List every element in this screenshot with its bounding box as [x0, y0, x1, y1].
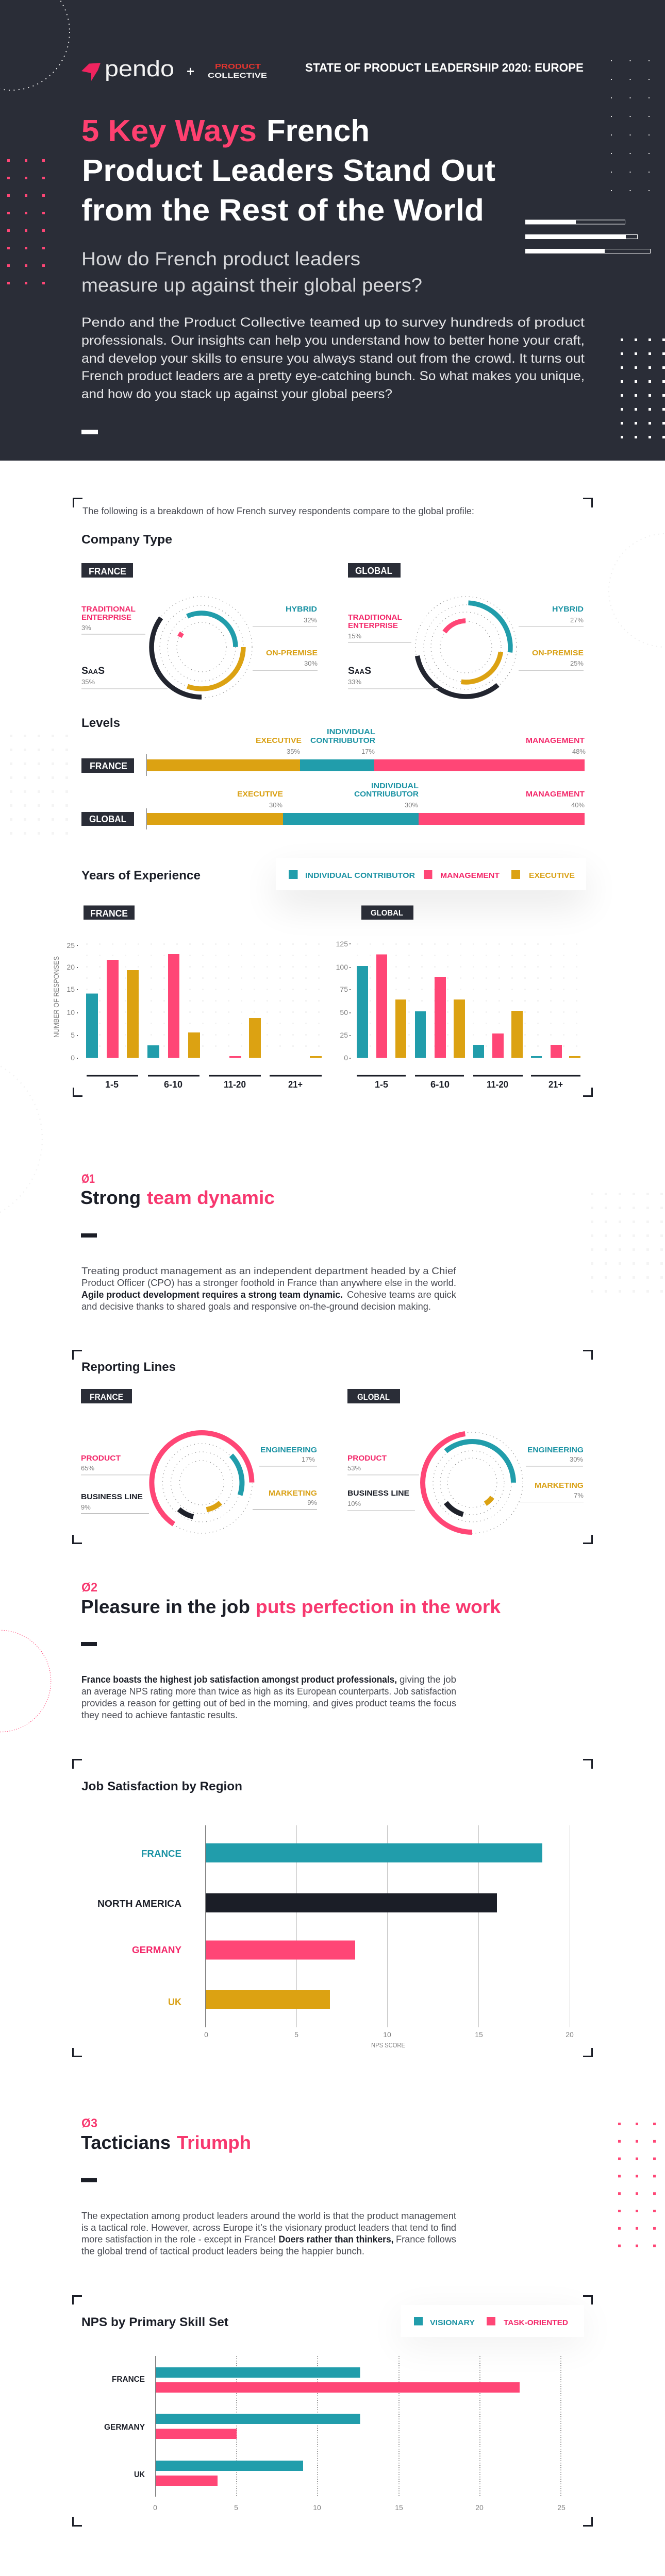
chart: years of experience france: 25: [66, 941, 75, 950]
chart: years of experience global: 21+: [548, 1079, 563, 1090]
chart: reporting lines global donut: [414, 1425, 530, 1541]
hero dash: [81, 430, 98, 434]
subtitle: [81, 248, 422, 296]
labels: company type global: ON-PREMISE: [532, 649, 584, 657]
bar chart: 0: [153, 2503, 157, 2512]
bar chart: NPS SCORE: [371, 2041, 405, 2049]
chart: company type global donut: [396, 578, 536, 717]
labels: company type france: 35%: [81, 678, 95, 686]
tag: france: [81, 1389, 132, 1403]
legend: TASK-ORIENTED: [504, 2318, 568, 2327]
heading: pleasure in the job: puts perfection in the work: [256, 1596, 501, 1617]
heading: company type: Company Type: [81, 533, 172, 547]
section number: Ø1: [81, 1172, 95, 1186]
legend: [401, 2305, 584, 2345]
chart: levels france: 35%: [287, 748, 300, 755]
chart: years of experience global: 50: [340, 1008, 348, 1016]
chart: years of experience global: 25: [340, 1031, 348, 1039]
labels: reporting lines global: 7%: [574, 1492, 584, 1499]
chart: years of experience france: 11-20: [224, 1079, 246, 1090]
heading: tacticians triumph: Triumph: [177, 2132, 251, 2153]
heading: Reporting Lines: [81, 1360, 176, 1374]
title: from the Rest of the World: [81, 193, 484, 227]
legend: VISIONARY: [430, 2318, 475, 2327]
heading: strong team dynamic: [80, 1187, 275, 1208]
labels: reporting lines france: 9%: [307, 1499, 317, 1506]
chart: years of experience france: NUMBER OF RESPONSES: [53, 956, 60, 1038]
chart: years of experience global: 75: [340, 985, 348, 993]
chart: levels france: INDIVIDUAL: [327, 727, 375, 736]
paragraph: and decisive thanks to shared goals and responsive on-the-ground decision making.: [81, 1301, 431, 1312]
heading: Job Satisfaction by Region: [81, 1780, 242, 1793]
bar chart: 15: [475, 2030, 483, 2039]
bar chart: UK: [134, 2470, 145, 2479]
panel: respondent profile: [53, 499, 592, 1096]
tag: global: GLOBAL: [357, 1392, 390, 1402]
bar chart: [104, 2356, 566, 2512]
labels: company type france: TRADITIONAL: [81, 605, 136, 614]
paragraph: an average NPS rating more than twice as high as its European counterparts. Job satisfaction: [81, 1686, 456, 1697]
labels: reporting lines france: MARKETING: [269, 1489, 317, 1498]
labels: company type france: HYBRID: [286, 605, 317, 614]
bar chart: 20: [566, 2030, 574, 2039]
chart: levels france: FRANCE: [90, 761, 127, 771]
intro paragraph: and how do you stack up against your global peers?: [81, 387, 392, 401]
heading: NPS by Primary Skill Set: [81, 2315, 228, 2329]
section 02: [81, 1581, 501, 1720]
tag: global: [348, 563, 401, 578]
labels: company type france: 3%: [81, 624, 91, 632]
chart: years of experience france: 1-5: [105, 1079, 119, 1090]
section 03: [81, 2116, 456, 2257]
chart: years of experience france: 21+: [288, 1079, 303, 1090]
intro paragraph: professionals. Our insights can help you understand how to better hone your craft,: [81, 333, 585, 348]
bar chart: [97, 1825, 574, 2049]
paragraph: more satisfaction in the role - except in France!: [81, 2234, 276, 2244]
decorative progress bars: [525, 219, 651, 253]
chart: levels global: GLOBAL: [89, 814, 126, 824]
chart: reporting lines france donut: [132, 1413, 271, 1552]
bar chart: GERMANY: [104, 2423, 145, 2432]
intro paragraph: and develop your skills to ensure you always stand out from the crowd. It turns out: [81, 351, 585, 366]
chart: years of experience france: 15: [66, 985, 75, 993]
bar chart: FRANCE: [141, 1849, 181, 1859]
tag: global: [347, 1389, 400, 1403]
legend: years of experience: [276, 858, 586, 906]
labels: company type france: 30%: [304, 659, 318, 667]
chart: levels france: EXECUTIVE: [256, 736, 302, 745]
labels: reporting lines france: BUSINESS LINE: [81, 1493, 143, 1501]
paragraph: Cohesive teams are quick: [347, 1290, 457, 1300]
chart: years of experience france: 6-10: [164, 1079, 182, 1090]
heading: years of experience: Years of Experience: [81, 869, 201, 883]
hero panel: [0, 0, 665, 461]
subtitle: measure up against their global peers?: [81, 275, 422, 296]
labels: company type global: HYBRID: [552, 605, 584, 614]
tag: france: [81, 563, 133, 578]
chart: years of experience global: 6-10: [430, 1079, 450, 1090]
labels: company type france: 32%: [304, 616, 317, 624]
chart: levels global: [81, 782, 585, 829]
paragraph: France boasts the highest job satisfaction amongst product professionals,: [81, 1674, 397, 1685]
labels: reporting lines france: [81, 1446, 317, 1514]
paragraph: [81, 2211, 456, 2257]
chart: levels global: EXECUTIVE: [237, 790, 283, 799]
labels: reporting lines global: [347, 1446, 584, 1511]
labels: reporting lines global: BUSINESS LINE: [347, 1489, 409, 1498]
heading: strong team dynamic: Strong: [80, 1187, 141, 1208]
bar chart: 0: [204, 2030, 208, 2039]
legend: years of experience: MANAGEMENT: [440, 871, 500, 880]
heading: levels: Levels: [81, 716, 120, 730]
title: French: [267, 114, 370, 148]
intro paragraph: French product leaders are a pretty eye-catching bunch. So what makes you unique,: [81, 369, 585, 383]
labels: company type global: SaaS: [348, 666, 371, 676]
bar chart: 10: [313, 2503, 321, 2512]
chart: years of experience global: 125: [336, 940, 348, 948]
paragraph: Doers rather than thinkers,: [278, 2234, 394, 2244]
chart: levels france: CONTRIUBUTOR: [310, 736, 375, 745]
chart: levels global: 30%: [405, 801, 418, 809]
chart: levels global: 30%: [269, 801, 282, 809]
tag: france: FRANCE: [90, 1392, 123, 1402]
tag: global: GLOBAL: [355, 566, 392, 576]
labels: company type france: [81, 605, 318, 689]
plus sign: +: [187, 63, 194, 79]
heading: tacticians triumph: Tacticians: [81, 2132, 171, 2153]
intro paragraph: Pendo and the Product Collective teamed up to survey hundreds of product: [81, 315, 585, 330]
paragraph: is a tactical role. However, across Europe it’s the visionary product leaders that tend to find: [81, 2223, 456, 2233]
heading: pleasure in the job: Pleasure in the job: [81, 1596, 250, 1617]
labels: reporting lines global: MARKETING: [535, 1481, 584, 1490]
bar chart: UK: [168, 1997, 181, 2007]
bar chart: 5: [294, 2030, 298, 2039]
panel: reporting lines: [73, 1351, 592, 1552]
chart: levels france: [81, 727, 586, 776]
labels: company type global: 15%: [348, 632, 361, 640]
report label: STATE OF PRODUCT LEADERSHIP 2020: EUROPE: [305, 61, 584, 74]
paragraph: The expectation among product leaders around the world is that the product management: [81, 2211, 456, 2221]
chart: years of experience global: 11-20: [487, 1079, 508, 1090]
product collective logo: PRODUCT: [215, 62, 261, 70]
product collective logo: [208, 62, 267, 79]
panel: NPS by primary skill set: [73, 2296, 592, 2526]
labels: company type global: TRADITIONAL: [348, 613, 402, 622]
paragraph: giving the job: [400, 1674, 456, 1685]
paragraph: [81, 1674, 456, 1720]
chart: levels france: 48%: [572, 748, 586, 755]
chart: years of experience france: FRANCE: [90, 908, 128, 919]
section 01: [80, 1172, 457, 1312]
labels: reporting lines global: PRODUCT: [347, 1454, 387, 1463]
bar chart: 20: [475, 2503, 484, 2512]
paragraph: they need to achieve fantastic results.: [81, 1710, 238, 1720]
chart: years of experience france: [53, 906, 322, 1090]
chart: years of experience global: 1-5: [375, 1079, 388, 1090]
labels: reporting lines france: 17%: [302, 1455, 315, 1463]
intro sentence: The following is a breakdown of how French survey respondents compare to the global profile:: [82, 506, 474, 516]
bar chart: FRANCE: [112, 2375, 145, 2384]
bar chart: 15: [395, 2503, 403, 2512]
bar chart: 10: [383, 2030, 391, 2039]
paragraph: Agile product development requires a strong team dynamic.: [81, 1290, 343, 1300]
paragraph: Product Officer (CPO) has a stronger foothold in France than anywhere else in the world.: [81, 1278, 456, 1288]
chart: levels france: MANAGEMENT: [526, 736, 585, 745]
paragraph: Treating product management as an independent department headed by a Chief: [81, 1266, 457, 1276]
labels: company type global: 27%: [570, 616, 584, 624]
section number: Ø2: [81, 1581, 97, 1595]
chart: levels france: 17%: [361, 748, 375, 755]
chart: years of experience global: 0: [344, 1054, 348, 1062]
section number: Ø3: [81, 2116, 97, 2130]
labels: reporting lines france: 65%: [81, 1464, 94, 1472]
legend: years of experience: EXECUTIVE: [529, 871, 575, 880]
paragraph: the global trend of tactical product leaders being the happier bunch.: [81, 2246, 364, 2257]
chart: years of experience france: 10: [66, 1008, 75, 1016]
labels: reporting lines global: 53%: [347, 1464, 361, 1472]
chart: company type france donut: [151, 597, 252, 698]
dash: [81, 1233, 97, 1238]
labels: company type global: 25%: [570, 659, 584, 667]
chart: levels global: 40%: [571, 801, 585, 809]
heading: strong team dynamic: team dynamic: [147, 1187, 275, 1208]
chart: years of experience global: GLOBAL: [371, 909, 403, 918]
labels: reporting lines global: 10%: [347, 1500, 361, 1507]
icon: pendo logo: [81, 56, 174, 81]
labels: reporting lines global: 30%: [570, 1455, 583, 1463]
labels: company type france: ON-PREMISE: [266, 649, 318, 657]
labels: company type france: SaaS: [81, 666, 105, 676]
chart: years of experience france: 0: [71, 1054, 75, 1062]
dash: [81, 2178, 97, 2182]
intro paragraph: [81, 315, 585, 401]
labels: company type global: 33%: [348, 678, 361, 686]
bar chart: GERMANY: [132, 1945, 181, 1955]
product collective logo: COLLECTIVE: [208, 71, 267, 79]
paragraph: provides a reason for getting out of bed in the morning, and gives product teams the focus: [81, 1698, 456, 1708]
dash: [81, 1642, 97, 1646]
bar chart: NORTH AMERICA: [97, 1899, 181, 1909]
paragraph: France follows: [396, 2234, 456, 2244]
heading: tacticians triumph: [81, 2132, 251, 2153]
decorative faint elements: [0, 534, 665, 2576]
labels: reporting lines france: PRODUCT: [81, 1454, 121, 1463]
heading: pleasure in the job: [81, 1596, 501, 1617]
title: [81, 114, 495, 227]
subtitle: How do French product leaders: [81, 248, 360, 269]
chart: levels global: INDIVIDUAL: [371, 782, 419, 790]
paragraph: [81, 1266, 457, 1312]
legend: years of experience: INDIVIDUAL CONTRIBUTOR: [305, 871, 415, 880]
labels: reporting lines france: ENGINEERING: [260, 1446, 317, 1454]
labels: company type global: ENTERPRISE: [348, 621, 398, 630]
chart: years of experience france: 5: [71, 1031, 75, 1039]
chart: years of experience global: 100: [336, 963, 348, 971]
chart: years of experience france: 20: [66, 963, 75, 971]
title: Product Leaders Stand Out: [82, 154, 495, 188]
panel: job satisfaction by region: [73, 1760, 592, 2057]
labels: reporting lines france: 9%: [81, 1503, 91, 1511]
icon: pendo logo: pendo: [105, 56, 174, 81]
chart: levels global: MANAGEMENT: [526, 790, 585, 799]
labels: company type global: [348, 605, 584, 689]
bar chart: 25: [557, 2503, 566, 2512]
title: 5 Key Ways: [81, 114, 257, 148]
tag: france: FRANCE: [89, 566, 126, 577]
bar chart: 5: [234, 2503, 238, 2512]
labels: company type france: ENTERPRISE: [81, 613, 131, 622]
chart: levels global: CONTRIUBUTOR: [354, 790, 419, 799]
labels: reporting lines global: ENGINEERING: [527, 1446, 584, 1454]
chart: years of experience global: [336, 906, 580, 1090]
